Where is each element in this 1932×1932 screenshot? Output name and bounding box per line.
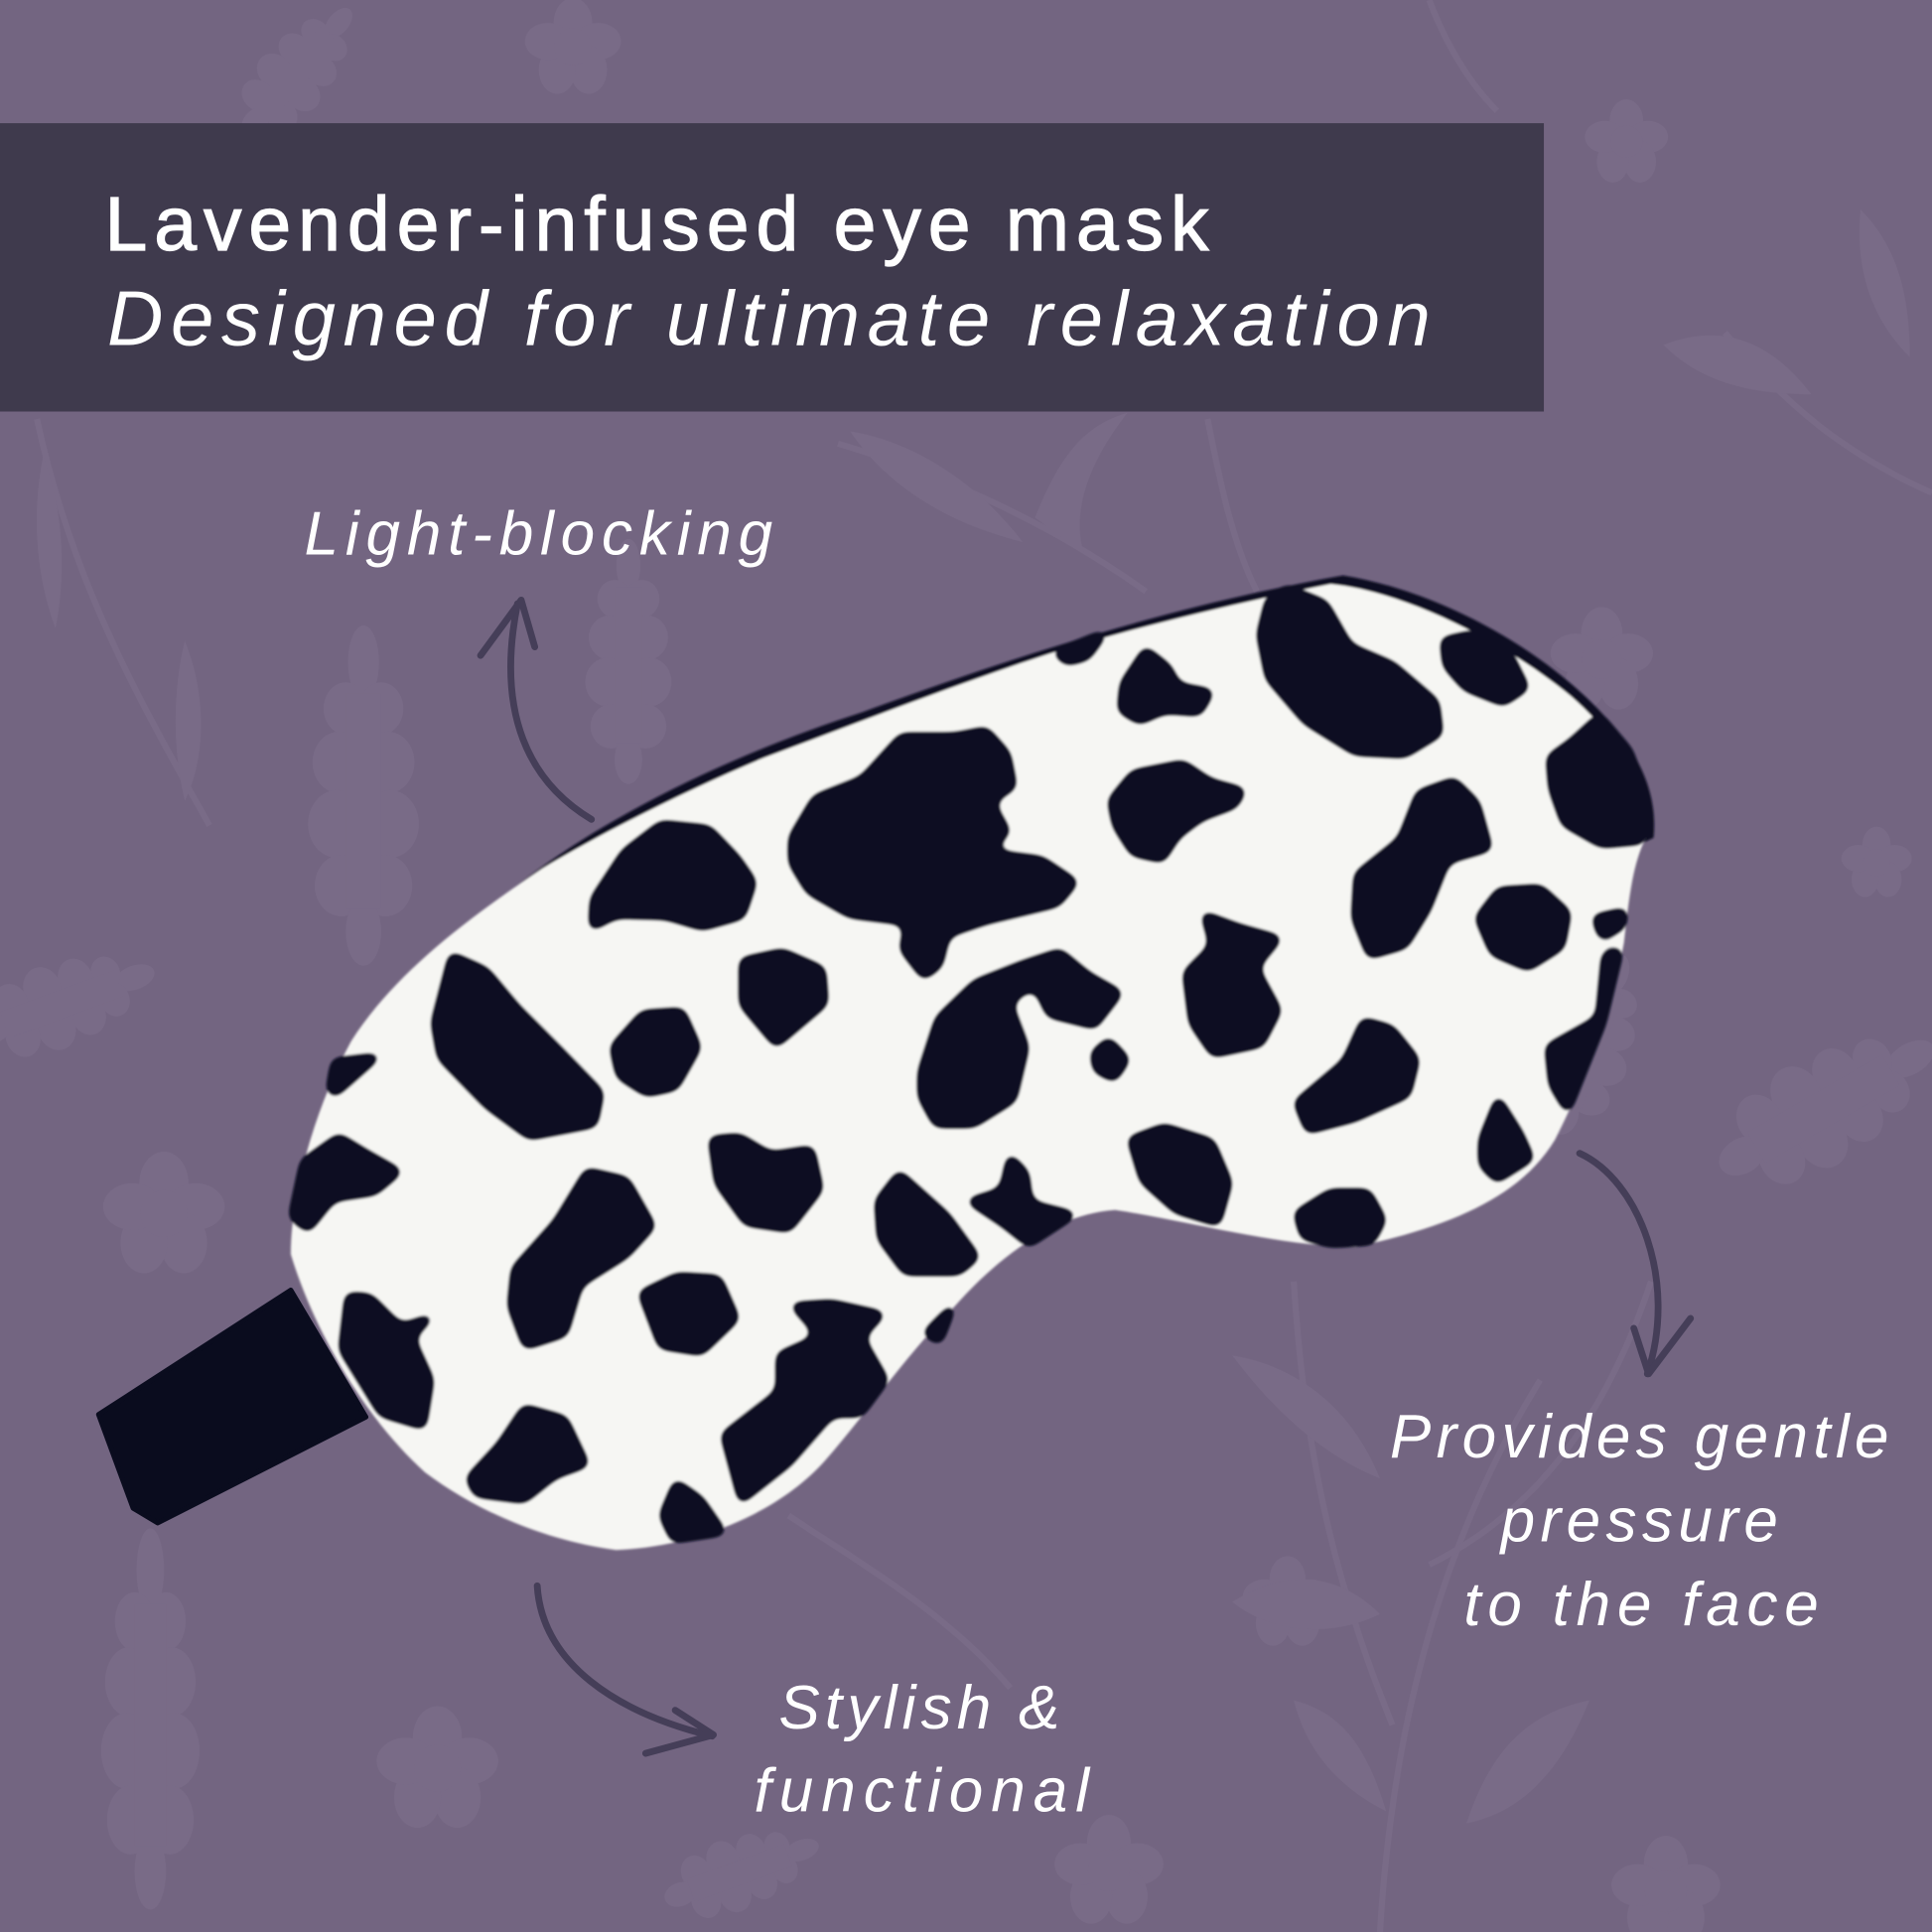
arrow: to Light-blocking — [481, 600, 592, 819]
subtitle: Designed for ultimate relaxation — [107, 274, 1431, 362]
arrow: to gentle pressure — [1580, 1154, 1691, 1374]
eye mask with cow print — [291, 576, 1654, 1550]
mask dark back edge — [492, 576, 1654, 986]
label: Light-blocking: Light-blocking — [305, 499, 772, 568]
title banner — [0, 123, 1544, 412]
mask fabric — [291, 584, 1646, 1550]
label: Stylish and functional — [755, 1674, 1091, 1825]
title heading: Lavender-infused eye mask — [104, 182, 1209, 267]
arrow: to Stylish and functional — [537, 1586, 714, 1753]
label: Stylish and functional: functional — [755, 1756, 1091, 1825]
cow print spots — [293, 589, 1649, 1539]
label: Stylish and functional: Stylish & — [778, 1674, 1059, 1742]
label: Provides gentle pressure to the face — [1390, 1403, 1889, 1639]
eye mask strap — [98, 1290, 366, 1523]
label: Provides gentle pressure to the face: Provides gentle — [1390, 1403, 1889, 1471]
label: Provides gentle pressure to the face: to the face — [1463, 1571, 1819, 1639]
label: Provides gentle pressure to the face: pressure — [1499, 1487, 1778, 1556]
